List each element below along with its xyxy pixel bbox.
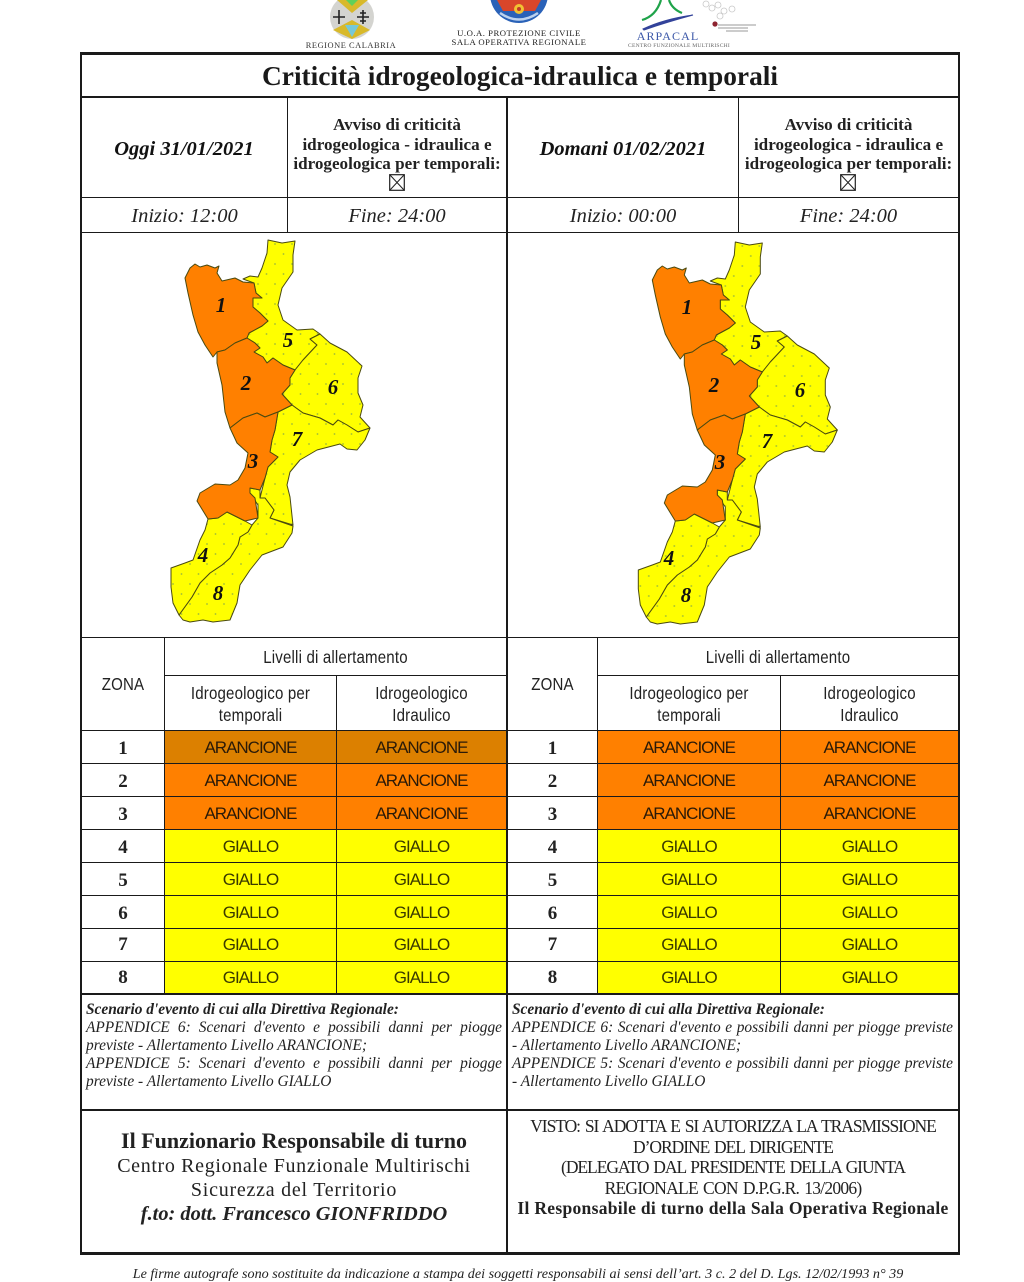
warning text: idrogeologica per temporali: [745,154,952,173]
text block: authorization: D’ORDINE DEL DIRIGENTE [633,1137,833,1157]
panel: tomorrow header [540,115,952,227]
rows: GIALLO [661,903,717,922]
zone numbers [197,293,339,605]
zone 3 [664,414,745,523]
rows: 7 [548,934,557,955]
zone numbers: 6 [328,375,339,399]
rows: GIALLO [223,870,278,889]
zone numbers: 8 [681,583,692,607]
rows: 5 [118,870,128,891]
text block: today scenario: previste - Allertamento Livello GIALLO [86,1073,331,1090]
text block: authorization: REGIONALE CON D.P.G.R. 13/2006) [605,1178,861,1198]
text block: tomorrow scenario: - Allertamento Livello ARANCIONE; [512,1037,741,1054]
rows: 1 [548,738,557,759]
rows: GIALLO [661,870,717,889]
column header: temporali [657,705,721,725]
zone 1 [185,264,268,357]
column header: Idraulico [840,705,899,725]
tomorrow date: Domani 01/02/2021 [540,138,706,160]
column header: temporali [219,705,282,725]
rows: ARANCIONE [375,771,468,790]
zone numbers: 7 [292,427,304,451]
text block: authorization [517,1116,949,1218]
rows: ARANCIONE [375,804,468,823]
zone header: ZONA [531,674,574,694]
title: Criticità idrogeologica-idraulica e temporali [262,61,778,91]
text block: duty officer: Centro Regionale Funzionale Multirischi [117,1155,471,1177]
rows: 5 [548,870,557,891]
start time: Inizio: 00:00 [570,205,676,227]
ARPACAL subtitle: CENTRO FUNZIONALE MULTIRISCHI [628,43,730,49]
text block: authorization: VISTO: SI ADOTTA E SI AUTORIZZA LA TRASMISSIONE [530,1116,936,1136]
rows: 4 [118,837,128,858]
zone numbers: 4 [197,543,208,567]
rows: GIALLO [394,968,449,987]
column header: Idrogeologico per [191,683,310,703]
footer note: Le firme autografe sono sostituite da indicazione a stampa dei soggetti responsabili ai sensi dell’art. 3 c. 2 del D. Lgs. 12/02/1993 n° 39 [133,1266,903,1282]
table: tomorrow alert levels [508,638,958,995]
levels header: Livelli di allertamento [706,647,850,667]
logo caption [452,28,586,47]
zone numbers [663,295,806,607]
zone 4 [171,512,252,615]
rows: ARANCIONE [204,804,297,823]
text block: today scenario [85,1001,502,1090]
text block: today scenario: APPENDICE 6: Scenari d'evento e possibili danni per piogge [86,1019,502,1036]
panel: today header [114,115,501,227]
column header [629,683,749,725]
rows: ARANCIONE [823,738,916,757]
logo caption: SALA OPERATIVA REGIONALE [452,37,586,47]
today date: Oggi 31/01/2021 [114,138,254,160]
zone numbers: 7 [762,429,774,453]
rows [508,730,958,995]
icon: crossed checkbox [840,174,856,191]
rows: 2 [118,771,128,792]
zone numbers: 8 [213,581,224,605]
zone numbers: 5 [283,328,293,352]
rows: GIALLO [394,935,449,954]
rows: GIALLO [842,870,897,889]
warning text: Avviso di criticità [785,115,912,134]
icon: Calabria crest [330,0,374,39]
column header: Idrogeologico per [629,683,749,703]
levels header: Livelli di allertamento [263,647,408,667]
text block: tomorrow scenario: - Allertamento Livello GIALLO [512,1073,705,1090]
text block: today scenario: APPENDICE 5: Scenari d'evento e possibili danni per piogge [86,1055,502,1072]
rows: 6 [548,903,557,924]
rows: GIALLO [223,968,278,987]
zone numbers: 6 [795,378,806,402]
rows: ARANCIONE [823,804,916,823]
text block: authorization: (DELEGATO DAL PRESIDENTE DELLA GIUNTA [561,1157,905,1177]
text block: duty officer: f.to: dott. Francesco GIONFRIDDO [141,1203,447,1225]
warning text [293,115,501,173]
rows: GIALLO [394,837,449,856]
rows: ARANCIONE [823,771,916,790]
zone 3 [197,412,278,521]
zone 6 [749,336,837,434]
zone 5 [243,240,320,370]
logo caption: REGIONE CALABRIA [306,41,396,50]
rows: GIALLO [661,935,717,954]
rows: ARANCIONE [643,804,735,823]
column header [823,683,916,725]
start time: Inizio: 12:00 [131,205,238,227]
column header: Idrogeologico [375,683,468,703]
rows: ARANCIONE [204,771,297,790]
zone 4 [638,514,719,617]
rows: GIALLO [661,837,717,856]
column header: Idrogeologico [823,683,916,703]
warning text: idrogeologica - idraulica e [302,135,492,154]
rows: 2 [548,771,557,792]
column header [191,683,310,725]
rows: ARANCIONE [204,738,297,757]
end time: Fine: 24:00 [800,205,897,227]
rows: 8 [548,967,557,988]
text block: tomorrow scenario [511,1001,953,1090]
rows: GIALLO [842,935,897,954]
icon: civil protection badge [490,0,548,23]
rows: ARANCIONE [643,771,735,790]
rows: GIALLO [842,837,897,856]
rows: GIALLO [223,837,278,856]
rows: ARANCIONE [375,738,468,757]
logo: Regione Calabria [306,0,396,50]
text block: tomorrow scenario: APPENDICE 5: Scenari d'evento e possibili danni per piogge previste [512,1055,953,1072]
icon: crossed checkbox [389,174,405,191]
rows: GIALLO [223,935,278,954]
column header: Idraulico [392,705,451,725]
column header [375,683,468,725]
warning text: Avviso di criticità [333,115,461,134]
rows: GIALLO [223,903,278,922]
rows: 1 [118,738,128,759]
map: tomorrow Calabria zones [638,242,838,624]
logo: ARPACAL [628,0,756,49]
text block: duty officer: Il Funzionario Responsabile di turno [121,1128,467,1153]
zone 6 [282,334,370,432]
zone numbers: 1 [216,293,226,317]
warning text: idrogeologica per temporali: [293,154,501,173]
table: today alert levels [82,638,506,995]
rows: 6 [118,903,128,924]
warning text [745,115,952,173]
zone header: ZONA [102,674,144,694]
text block: today scenario: previste - Allertamento Livello ARANCIONE; [86,1037,367,1054]
zone 2 [217,338,295,428]
zone numbers: 4 [663,546,674,570]
zone 7 [727,407,837,527]
rows: 3 [548,804,557,825]
text block: tomorrow scenario: APPENDICE 6: Scenari d'evento e possibili danni per piogge previste [512,1019,953,1036]
text block: duty officer [117,1128,471,1225]
logo caption: U.O.A. PROTEZIONE CIVILE [457,28,581,38]
text block: today scenario: Scenario d'evento di cui alla Direttiva Regionale: [86,1001,399,1018]
zone 8 [179,488,293,622]
text block: duty officer: Sicurezza del Territorio [191,1179,397,1201]
end time: Fine: 24:00 [348,205,446,227]
zone 7 [260,405,370,525]
rows: 7 [118,934,128,955]
map: today Calabria zones [170,240,370,622]
zone 2 [684,340,762,430]
zone 1 [652,266,735,359]
text block: tomorrow scenario: Scenario d'evento di cui alla Direttiva Regionale: [512,1001,825,1018]
zone numbers: 3 [714,450,725,474]
zone 5 [710,242,787,372]
warning text: idrogeologica - idraulica e [754,135,943,154]
zone numbers: 3 [247,449,258,473]
icon: ARPACAL swoosh [642,0,756,32]
ARPACAL name: ARPACAL [637,29,699,43]
logo: Protezione Civile [452,0,586,47]
zone numbers: 2 [708,373,720,397]
rows: 4 [548,837,557,858]
zone numbers: 2 [240,371,252,395]
rows: GIALLO [394,870,449,889]
rows [82,730,506,995]
rows: 8 [118,967,128,988]
zone numbers: 5 [751,330,761,354]
rows: GIALLO [394,903,449,922]
rows: 3 [118,804,128,825]
text block: authorization: Il Responsabile di turno della Sala Operativa Regionale [517,1198,949,1218]
zone numbers: 1 [682,295,692,319]
rows: GIALLO [842,968,897,987]
rows: GIALLO [842,903,897,922]
zone 8 [646,490,760,624]
rows: ARANCIONE [643,738,735,757]
rows: GIALLO [661,968,717,987]
